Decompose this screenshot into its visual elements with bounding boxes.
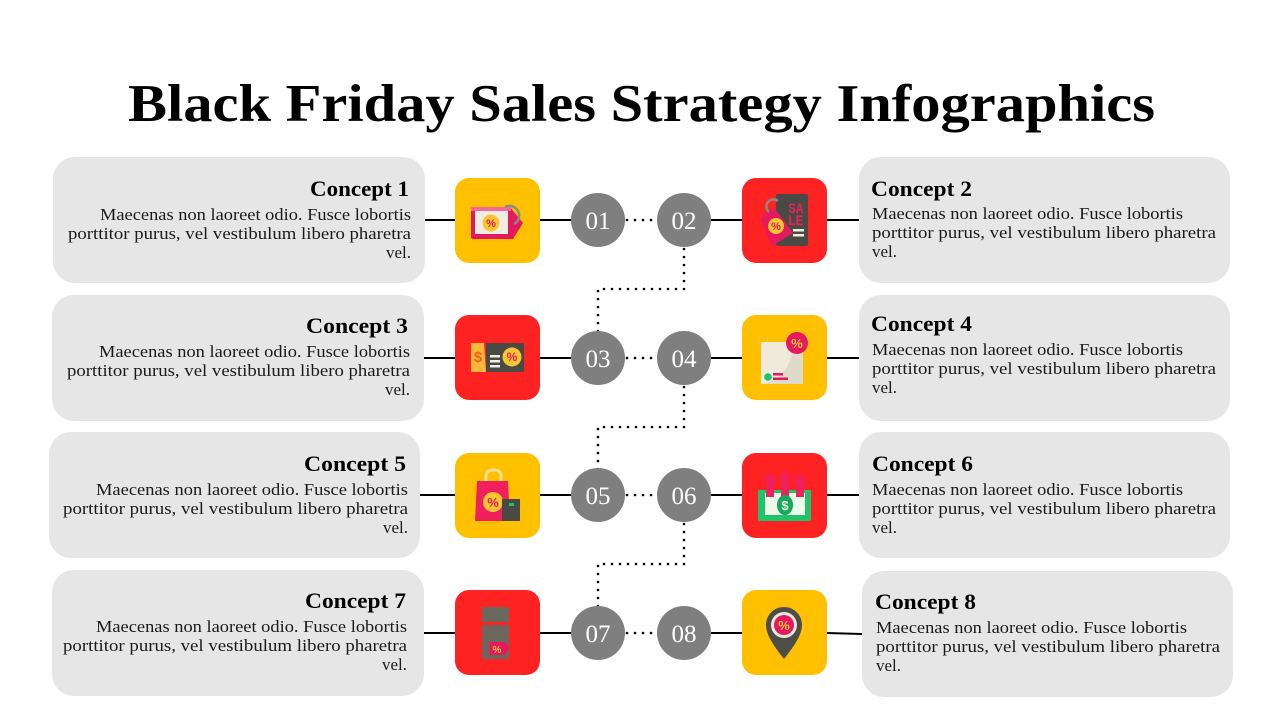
panel: concept 7: Maecenas non laoreet odio. Fusce lobortis: [96, 617, 407, 636]
panel: concept 2: Maecenas non laoreet odio. Fusce lobortis: [872, 204, 1183, 223]
panel: concept 2: porttitor purus, vel vestibulum libero pharetra: [872, 223, 1217, 242]
panel: concept 2: vel.: [872, 242, 897, 261]
panel: concept 6: Concept 6: [872, 451, 973, 476]
panel: concept 6: porttitor purus, vel vestibulum libero pharetra: [872, 499, 1217, 518]
panel: concept 1: vel.: [386, 243, 411, 262]
number 02: 02: [672, 208, 696, 235]
panel: concept 4: porttitor purus, vel vestibulum libero pharetra: [872, 359, 1217, 378]
number 05: 05: [586, 483, 610, 510]
panel: concept 5: [49, 432, 420, 558]
icon: receipt with badge: %: [791, 336, 803, 351]
icon: sale tag and phone: LE: [788, 212, 804, 228]
number 03: [571, 331, 625, 385]
panel: concept 1: porttitor purus, vel vestibulum libero pharetra: [68, 224, 412, 243]
panel: concept 3: vel.: [385, 380, 410, 399]
panel: concept 1: Concept 1: [310, 176, 409, 201]
panel: concept 3: Concept 3: [306, 313, 408, 338]
panel: concept 4: vel.: [872, 378, 897, 397]
icon: shopping bag: [455, 453, 540, 538]
number 04: 04: [672, 346, 697, 373]
panel: concept 2: [859, 157, 1230, 283]
panel: concept 6: [859, 432, 1230, 558]
icon: price tag: [455, 178, 540, 263]
icon: coupon ticket: %: [507, 350, 518, 364]
icon: sale tag and phone: [742, 178, 827, 263]
icon: refrigerator with tag: [455, 590, 540, 675]
icon: refrigerator with tag: %: [493, 645, 502, 656]
number 01: [571, 193, 625, 247]
number 01: 01: [586, 208, 610, 235]
icon: shopping bag: %: [487, 495, 499, 510]
number 08: 08: [672, 621, 696, 648]
panel: concept 8: [862, 571, 1233, 697]
connector lines: [420, 220, 862, 634]
panel: concept 5: Maecenas non laoreet odio. Fusce lobortis: [96, 480, 408, 499]
number 07: 07: [586, 621, 610, 648]
panel: concept 6: Maecenas non laoreet odio. Fusce lobortis: [872, 480, 1183, 499]
panel: concept 7: Concept 7: [305, 588, 406, 613]
panel: concept 3: [52, 295, 424, 421]
panel: concept 4: Maecenas non laoreet odio. Fusce lobortis: [872, 340, 1183, 359]
icon: money with arrows: [742, 453, 827, 538]
number 06: 06: [672, 483, 696, 510]
panel: concept 5: porttitor purus, vel vestibulum libero pharetra: [63, 499, 409, 518]
number 04: [657, 331, 711, 385]
panel: concept 7: [52, 570, 424, 696]
panel: concept 8: Maecenas non laoreet odio. Fusce lobortis: [876, 618, 1187, 637]
icon: money with arrows: $: [781, 498, 789, 513]
icon: location pin: %: [778, 618, 790, 633]
icon: coupon ticket: [455, 315, 540, 400]
panel: concept 7: porttitor purus, vel vestibulum libero pharetra: [63, 636, 408, 655]
panel: concept 8: Concept 8: [875, 589, 976, 614]
panel: concept 5: vel.: [383, 518, 408, 537]
panel: concept 6: vel.: [872, 518, 897, 537]
number 08: [657, 606, 711, 660]
number 07: [571, 606, 625, 660]
title: Black Friday Sales Strategy Infographics: [128, 75, 1155, 133]
icon: location pin: [742, 590, 827, 675]
panel: concept 4: [859, 295, 1230, 421]
icon: sale tag and phone: SA: [788, 200, 804, 216]
number 05: [571, 468, 625, 522]
panel: concept 7: vel.: [382, 655, 407, 674]
panel: concept 5: Concept 5: [304, 451, 406, 476]
panel: concept 2: Concept 2: [871, 176, 972, 201]
panel: concept 3: porttitor purus, vel vestibulum libero pharetra: [67, 361, 411, 380]
number 02: [657, 193, 711, 247]
panel: concept 8: vel.: [876, 656, 901, 675]
icon: coupon ticket: $: [474, 349, 483, 366]
number 03: 03: [586, 346, 610, 373]
number 06: [657, 468, 711, 522]
icon: receipt with badge: [742, 315, 827, 400]
icon: price tag: %: [486, 218, 496, 230]
panel: concept 1: [53, 157, 425, 283]
panel: concept 8: porttitor purus, vel vestibulum libero pharetra: [876, 637, 1221, 656]
dotted connectors: [598, 220, 684, 633]
panel: concept 4: Concept 4: [871, 311, 972, 336]
panel: concept 1: Maecenas non laoreet odio. Fusce lobortis: [100, 205, 411, 224]
panel: concept 3: Maecenas non laoreet odio. Fusce lobortis: [99, 342, 410, 361]
icon: sale tag and phone: %: [771, 221, 781, 233]
